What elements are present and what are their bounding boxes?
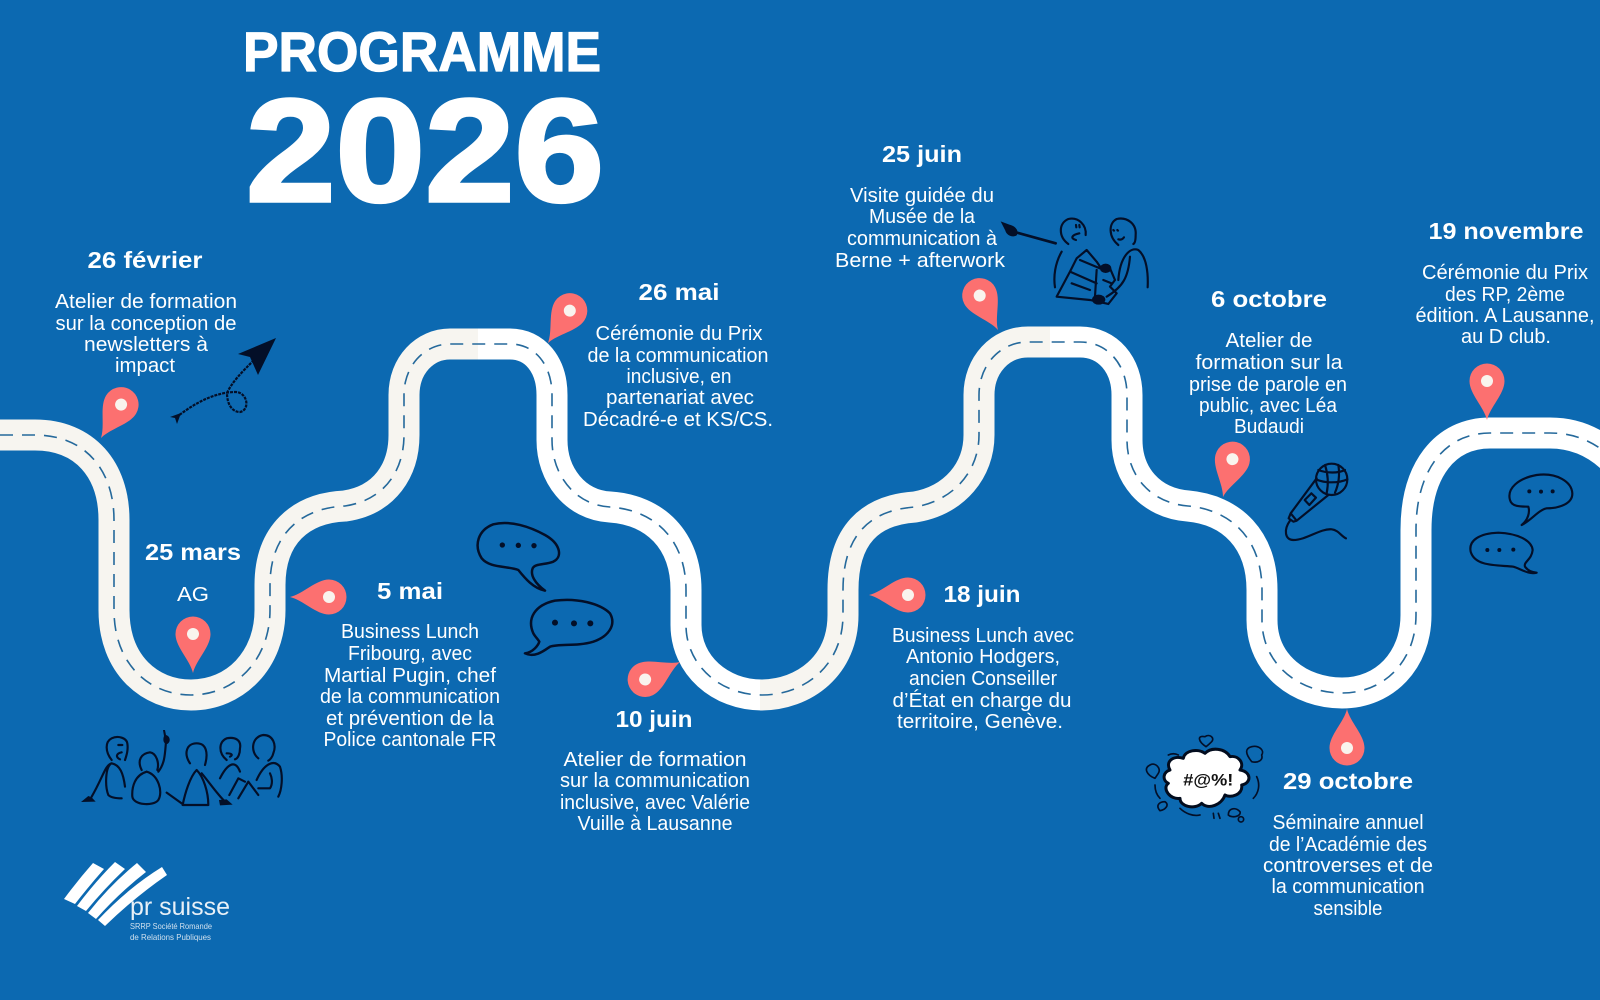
date: 5 mai [377,578,443,604]
date: 25 mars [145,539,241,565]
description: Budaudi [1234,416,1304,438]
description: Berne + afterwork [835,250,1006,272]
pin [1470,364,1504,420]
description: ancien Conseiller [909,668,1057,690]
description: inclusive, avec Valérie [560,792,750,814]
description: au D club. [1461,326,1551,348]
description: impact [115,355,175,377]
description: Atelier de [1226,330,1312,352]
event: 6 octobre [1189,286,1347,501]
description: de la communication [320,686,500,708]
pin [290,580,346,614]
date: 6 octobre [1211,286,1327,312]
description: édition. A Lausanne, [1416,305,1594,327]
logo subtitle: SRRP Société Romande [130,921,212,931]
icon: paper plane [170,338,276,424]
description: controverses et de [1263,855,1433,877]
icon: microphone [1286,464,1347,540]
description: Musée de la [869,206,976,228]
description: Martial Pugin, chef [324,665,496,687]
description: newsletters à [84,334,209,356]
description: Séminaire annuel [1272,812,1424,834]
description: sur la communication [560,770,750,792]
icon: speech bubbles right [1470,475,1572,573]
description: Business Lunch avec [892,625,1074,647]
title [243,20,604,232]
description: et prévention de la [326,708,495,730]
description: Vuille à Lausanne [578,813,732,835]
description: prise de parole en [1189,374,1347,396]
description: sensible [1314,898,1382,920]
event: 18 juin [869,578,1074,733]
icon: swear cloud [1146,736,1263,822]
icon: group of people [81,730,282,805]
description: inclusive, en [626,366,732,388]
date: 19 novembre [1428,218,1584,244]
description: Cérémonie du Prix [1422,262,1588,284]
description [55,291,237,377]
description [892,625,1074,733]
logo name: pr suisse [130,893,230,921]
description: de l’Académie des [1269,834,1427,856]
pin [533,286,594,353]
description: Atelier de formation [564,749,746,771]
date: 10 juin [616,706,692,732]
description: Décadré-e et KS/CS. [583,409,773,431]
description: formation sur la [1196,352,1343,374]
description [1416,262,1594,348]
icon: two people with a map [1001,219,1148,305]
logo: pr suisse: de Relations Publiques [130,932,211,942]
description: Antonio Hodgers, [906,646,1060,668]
description: partenariat avec [606,387,754,409]
description: sur la conception de [56,313,236,335]
description: la communication [1272,876,1424,898]
event: 29 octobre [1263,709,1433,920]
pin [1206,438,1254,501]
logo mark [64,862,167,926]
event: 5 mai [290,578,500,751]
event: 25 juin [835,141,1013,338]
pin [869,578,926,612]
pin [176,616,210,673]
description: territoire, Genève. [897,711,1063,733]
description: AG [177,584,209,606]
date: 18 juin [944,581,1020,607]
description: Visite guidée du [850,185,994,207]
description: d’État en charge du [892,689,1072,712]
description: de la communication [588,345,768,367]
description [835,185,1006,272]
pin [1330,709,1364,766]
description [560,749,750,835]
event: 26 février [55,247,237,447]
title line: year: 2026 [246,69,604,232]
description: des RP, 2ème [1445,284,1565,306]
date: 29 octobre [1283,768,1413,794]
event: 19 novembre [1416,218,1594,420]
title line: programme: PROGRAMME [243,20,601,83]
pin [956,272,1013,338]
description [1263,812,1433,920]
event: 25 mars [145,539,241,673]
description: Fribourg, avec [348,643,472,665]
date: 26 février [88,247,203,273]
description: Business Lunch [341,621,479,643]
description [1189,330,1347,438]
date: 26 mai [638,279,720,305]
description [583,323,773,431]
description: communication à [847,228,998,250]
date: 25 juin [882,141,962,167]
event: 26 mai [533,279,773,431]
description: Atelier de formation [55,291,237,313]
description: Police cantonale FR [324,729,496,751]
description: Cérémonie du Prix [596,323,762,345]
pin [86,381,145,447]
description: public, avec Léa [1199,395,1338,417]
description [320,621,500,751]
icon: speech bubbles centre [478,523,612,655]
event: 10 juin [560,646,750,835]
icon: swear cloud: #@%! [1183,771,1233,790]
logo: pr suisse [64,862,230,942]
winding road [0,342,1600,695]
pin [622,646,688,703]
